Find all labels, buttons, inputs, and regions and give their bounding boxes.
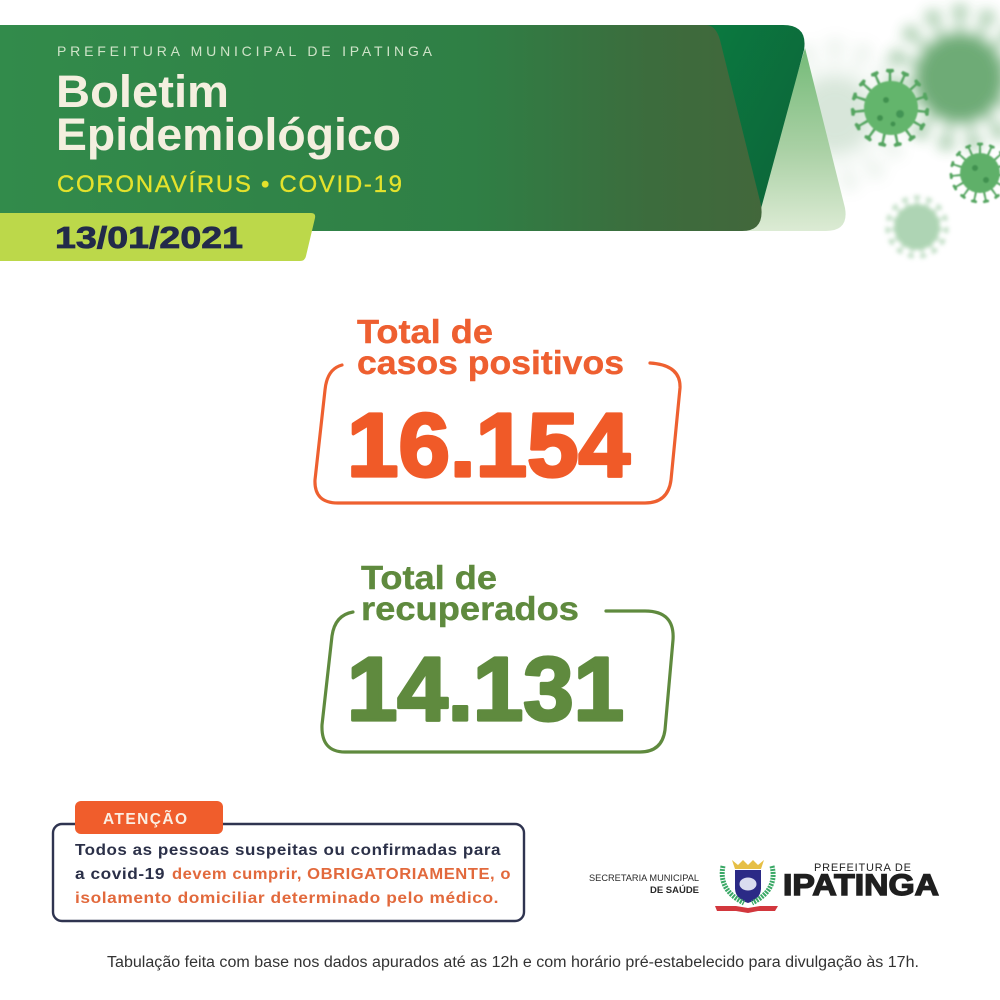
frame bbox=[315, 363, 680, 503]
light triangle panel bbox=[740, 48, 846, 231]
heading: Total de bbox=[357, 313, 493, 350]
heading bbox=[361, 559, 579, 627]
frame bbox=[322, 611, 673, 752]
callout text: isolamento domiciliar determinado pelo médico. bbox=[75, 890, 499, 907]
tab label: ATENÇÃO bbox=[103, 810, 187, 828]
heading: Total de bbox=[361, 559, 497, 596]
virus illustrations bbox=[851, 7, 1000, 258]
virus: sharp right bbox=[949, 143, 1000, 203]
prefeitura de ipatinga wordmark: IPATINGA bbox=[783, 869, 939, 902]
title: Boletim bbox=[56, 66, 229, 117]
header banner bbox=[0, 25, 846, 231]
heading bbox=[357, 313, 624, 381]
panel: recuperados bbox=[322, 559, 673, 752]
callout: atenção bbox=[53, 801, 524, 921]
callout frame bbox=[53, 824, 524, 921]
secretaria label: SECRETARIA MUNICIPAL bbox=[589, 873, 699, 884]
callout text: devem cumprir, OBRIGATORIAMENTE, o bbox=[172, 866, 511, 883]
prefeitura de ipatinga wordmark: PREFEITURA DE bbox=[814, 862, 911, 874]
title: Epidemiológico bbox=[56, 109, 401, 160]
virus: pale bottom bbox=[886, 196, 948, 258]
dark green panel bbox=[700, 25, 805, 231]
icon: coat of arms bbox=[715, 860, 778, 913]
number: 14.131 bbox=[347, 640, 624, 740]
logos bbox=[589, 860, 939, 913]
date tag bbox=[0, 213, 315, 261]
virus: sharp centre bbox=[851, 69, 929, 147]
callout text bbox=[75, 842, 511, 907]
footnote: Tabulação feita com base nos dados apurados até as 12h e com horário pré-estabelecido para divulgação às 17h. bbox=[107, 954, 919, 971]
subtitle: CORONAVÍRUS • COVID-19 bbox=[57, 171, 402, 198]
callout text: Todos as pessoas suspeitas ou confirmadas para bbox=[75, 842, 501, 859]
callout tab bbox=[75, 801, 223, 834]
secretaria label bbox=[589, 873, 699, 896]
callout text: a covid-19 bbox=[75, 866, 165, 883]
panel: casos positivos bbox=[315, 313, 680, 503]
title bbox=[56, 66, 401, 160]
secretaria label: DE SAÚDE bbox=[650, 884, 699, 896]
blurred virus behind header bbox=[761, 41, 909, 189]
virus: large blurred top right bbox=[888, 7, 1000, 149]
heading: recuperados bbox=[361, 590, 579, 627]
header kicker: PREFEITURA MUNICIPAL DE IPATINGA bbox=[57, 43, 433, 59]
number: 16.154 bbox=[347, 396, 630, 496]
main green panel bbox=[0, 25, 762, 231]
heading: casos positivos bbox=[357, 344, 624, 381]
date tag: 13/01/2021 bbox=[55, 220, 243, 255]
